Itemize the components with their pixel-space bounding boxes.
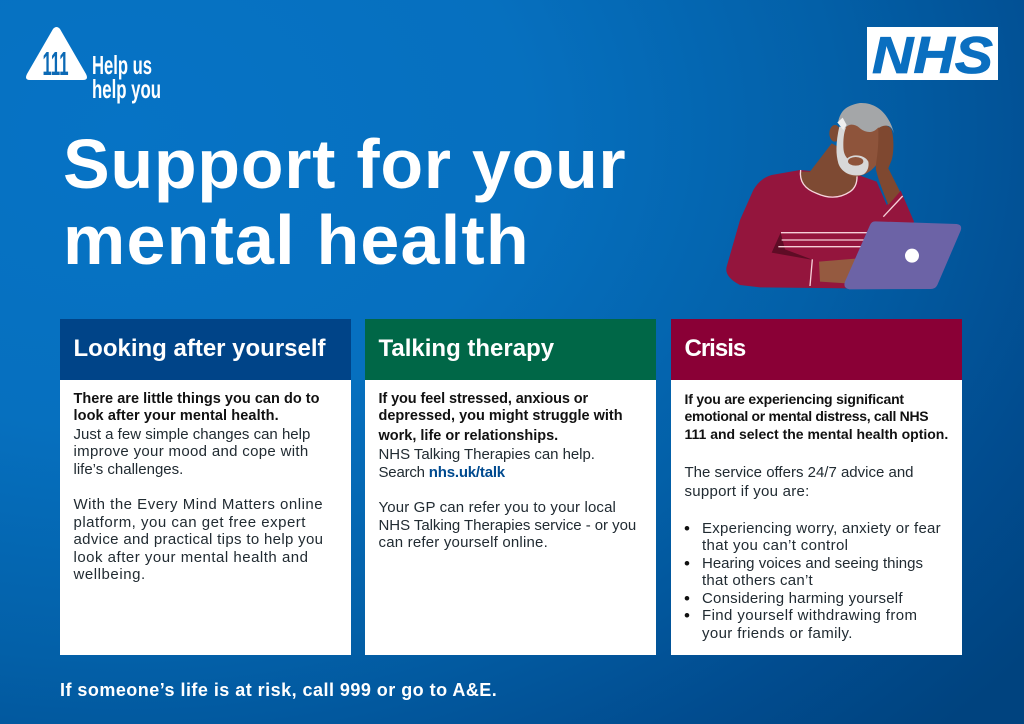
text block: talking therapy: NHS Talking Therapies can help. bbox=[378, 446, 595, 463]
text block: looking after yourself: wellbeing. bbox=[74, 566, 146, 583]
icon: 111 triangle: 111 bbox=[42, 45, 68, 82]
hair bbox=[838, 103, 894, 133]
heading: talking therapy bbox=[365, 319, 656, 380]
hand on head bbox=[876, 126, 900, 205]
text block: talking therapy: work, life or relationships. bbox=[378, 428, 558, 444]
text block: looking after yourself: There are little things you can do to bbox=[74, 391, 320, 407]
text block: crisis: • bbox=[684, 519, 690, 538]
text block: crisis: Experiencing worry, anxiety or fear bbox=[702, 520, 941, 537]
text block: looking after yourself: With the Every Mind Matters online bbox=[74, 496, 323, 513]
panel: looking after yourself bbox=[60, 319, 351, 655]
sweater bbox=[726, 170, 914, 288]
text block: crisis: The service offers 24/7 advice and bbox=[684, 464, 914, 481]
text block: talking therapy: Your GP can refer you to your local bbox=[378, 499, 616, 516]
logo text bbox=[92, 50, 161, 104]
text block: talking therapy bbox=[378, 391, 636, 551]
text block: crisis: emotional or mental distress, call NHS bbox=[684, 408, 928, 424]
text block: looking after yourself: look after your mental health and bbox=[74, 549, 308, 566]
panel: crisis bbox=[671, 319, 962, 655]
logo: 111 Help us help you bbox=[26, 27, 161, 104]
text block: crisis: • bbox=[684, 554, 690, 573]
title bbox=[63, 125, 626, 279]
text block: crisis: 111 and select the mental health option. bbox=[684, 426, 948, 442]
title: mental health bbox=[63, 201, 530, 279]
heading: crisis: Crisis bbox=[684, 335, 745, 362]
laptop bbox=[844, 221, 961, 289]
text block: talking therapy: If you feel stressed, anxious or bbox=[378, 391, 588, 407]
text block: crisis: your friends or family. bbox=[702, 625, 853, 642]
text block: crisis: • bbox=[684, 606, 690, 625]
footer message: If someone’s life is at risk, call 999 or go to A&E. bbox=[60, 680, 497, 700]
text block: looking after yourself: platform, you can get free expert bbox=[74, 514, 306, 531]
text block: looking after yourself: improve your mood and cope with bbox=[74, 443, 309, 460]
text block: talking therapy: NHS Talking Therapies service - or you bbox=[378, 517, 636, 534]
text block: crisis: • bbox=[684, 589, 690, 608]
text block: looking after yourself bbox=[74, 391, 323, 583]
text block: crisis bbox=[684, 391, 948, 642]
text block: crisis: support if you are: bbox=[684, 483, 810, 500]
panel: talking therapy bbox=[365, 319, 656, 655]
heading: looking after yourself bbox=[60, 319, 351, 380]
text block: crisis: Find yourself withdrawing from bbox=[702, 607, 917, 624]
forearm and hand at keyboard bbox=[819, 258, 858, 283]
text block: crisis: that you can’t control bbox=[702, 537, 848, 554]
beard bbox=[836, 127, 869, 175]
laptop logo bbox=[905, 249, 919, 263]
text block: talking therapy: Search nhs.uk/talk bbox=[378, 464, 505, 481]
text block: crisis: that others can’t bbox=[702, 572, 813, 589]
text block: looking after yourself: advice and practical tips to help you bbox=[74, 531, 323, 548]
text block: talking therapy: can refer yourself online. bbox=[378, 534, 548, 551]
heading: looking after yourself: Looking after yourself bbox=[74, 335, 326, 362]
text block: talking therapy: depressed, you might struggle with bbox=[378, 408, 623, 424]
text block: crisis: Hearing voices and seeing things bbox=[702, 555, 923, 572]
ear bbox=[829, 125, 841, 142]
text block: looking after yourself: look after your mental health. bbox=[74, 408, 279, 424]
sideburn bbox=[837, 118, 847, 130]
mouth bbox=[848, 157, 863, 166]
text block: looking after yourself: life’s challenges. bbox=[74, 461, 183, 478]
neck and chest skin bbox=[800, 143, 867, 196]
arm fold shadow bbox=[772, 213, 813, 260]
title: Support for your bbox=[63, 125, 626, 203]
heading: talking therapy: Talking therapy bbox=[378, 335, 554, 362]
text block: looking after yourself: Just a few simple changes can help bbox=[74, 426, 310, 443]
text block: crisis: Considering harming yourself bbox=[702, 590, 903, 607]
face bbox=[836, 123, 881, 177]
sweater stripes bbox=[778, 196, 903, 286]
text block: crisis: If you are experiencing significant bbox=[684, 391, 904, 407]
neckline stripe bbox=[800, 170, 857, 197]
illustration: man with head in hand at laptop bbox=[726, 103, 962, 290]
heading: crisis bbox=[671, 319, 962, 380]
